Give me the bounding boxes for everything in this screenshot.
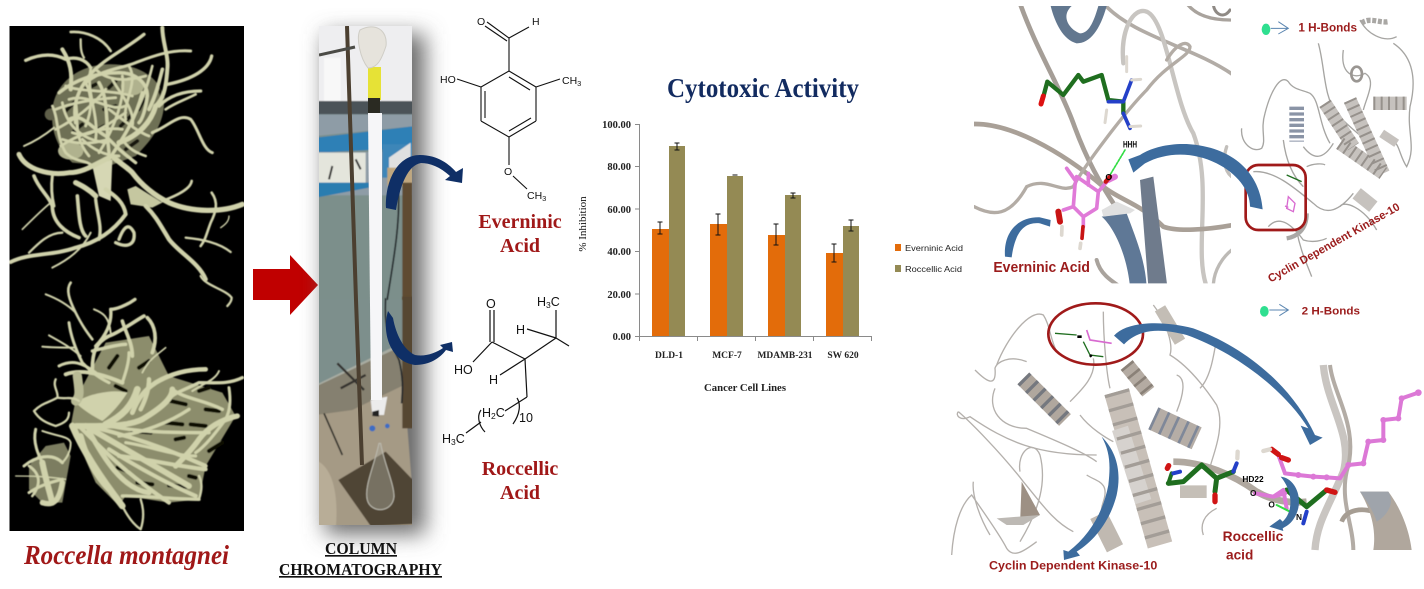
chemical structure: everninic acid: HO xyxy=(440,74,456,86)
docked ligand: roccellic acid xyxy=(1167,389,1422,523)
label: cyclin dependent kinase-10 bottom: Cyclin Dependent Kinase-10 xyxy=(989,558,1158,572)
docked ligand: roccellic acid: O xyxy=(1268,500,1275,510)
arrow: roccellic acid label xyxy=(1269,477,1299,531)
chemical structure: everninic acid: 3 xyxy=(542,194,546,203)
black band xyxy=(368,98,380,113)
yellow band xyxy=(368,67,381,100)
chemical structure: everninic acid xyxy=(440,16,581,203)
white stopper xyxy=(358,27,386,68)
legend: 2 H-bonds: 2 H-Bonds xyxy=(1302,306,1360,318)
label: roccellic acid: Roccellic xyxy=(482,458,558,480)
chemical structure: everninic acid: 3 xyxy=(577,79,581,88)
value axis labels: 100.00 xyxy=(602,120,631,131)
arrow: lichen to column xyxy=(253,255,318,315)
bars: roccellic acid xyxy=(669,146,859,336)
arrow: column to everninic acid xyxy=(386,155,463,210)
legend: 1 H-bonds xyxy=(1262,20,1357,35)
panel: lichen photo Roccella montagnei xyxy=(10,26,244,531)
lichen specimen: lower xyxy=(16,276,242,529)
label: roccellic acid: Acid xyxy=(500,482,540,504)
value axis labels: 0.00 xyxy=(613,332,631,343)
arrow: everninic overview to close-up xyxy=(1128,144,1263,209)
helices xyxy=(1325,100,1407,207)
category labels: SW 620 xyxy=(827,351,859,361)
label: everninic acid: Acid xyxy=(500,235,540,257)
legend: Roccellic Acid xyxy=(905,264,962,274)
column chromatography caption: COLUMN xyxy=(325,539,397,558)
panel: CDK-10 protein overview top xyxy=(1242,20,1413,277)
chemical structure: roccellic acid xyxy=(442,295,569,447)
chemical structure: roccellic acid: 2 xyxy=(491,411,496,421)
lichen specimen: upper xyxy=(11,28,242,279)
column chromatography caption: CHROMATOGRAPHY xyxy=(279,560,442,579)
chemical structure: everninic acid: CH xyxy=(562,75,577,87)
error bars xyxy=(658,143,854,262)
legend xyxy=(895,243,963,274)
value axis labels: 60.00 xyxy=(607,205,631,216)
chemical structure: roccellic acid: H xyxy=(537,295,546,309)
chemical structure: roccellic acid: H xyxy=(489,373,498,387)
chemical structure: roccellic acid: H xyxy=(442,432,451,446)
legend: 1 H-bonds: 1 H-Bonds xyxy=(1298,20,1357,34)
legend: 2 H-bonds xyxy=(1260,304,1360,318)
species name: Roccella montagnei xyxy=(23,540,229,570)
axis title: cancer cell lines: Cancer Cell Lines xyxy=(704,383,786,394)
label: everninic acid xyxy=(478,211,562,257)
photo scene xyxy=(316,23,416,530)
category labels: MDAMB-231 xyxy=(758,351,813,361)
clamp xyxy=(319,47,355,55)
docked ligand: roccellic acid: HD22 xyxy=(1242,474,1264,484)
docked ligand: everninic acid xyxy=(1041,57,1141,248)
arrow: everninic acid label xyxy=(1005,217,1051,257)
glass column xyxy=(368,113,382,400)
bars: everninic acid xyxy=(652,224,843,336)
column chromatography caption xyxy=(279,539,442,579)
label: roccellic acid docking: Roccellic xyxy=(1223,528,1284,544)
stand rod xyxy=(347,26,362,465)
arrow: protein label xyxy=(1063,437,1119,560)
chemical structure: roccellic acid: H xyxy=(516,323,525,337)
chemical structure: roccellic acid: 10 xyxy=(519,411,533,425)
label: roccellic acid docking xyxy=(1223,528,1284,563)
chemical structure: roccellic acid: H xyxy=(482,406,491,420)
axes xyxy=(635,124,872,341)
chemical structure: roccellic acid: C xyxy=(496,406,505,420)
chemical structure: everninic acid: H xyxy=(532,16,540,28)
label: everninic acid: Everninic xyxy=(478,211,562,233)
legend: Everninic Acid xyxy=(905,243,963,253)
value axis labels: 40.00 xyxy=(607,247,631,258)
chemical structure: roccellic acid: 3 xyxy=(546,300,551,310)
arrow: ellipse to roccellic close-up xyxy=(1114,323,1323,445)
label: roccellic acid docking: acid xyxy=(1226,547,1253,563)
chemical structure: roccellic acid: O xyxy=(486,297,496,311)
docked ligand: everninic acid: O xyxy=(1105,172,1112,182)
docked ligand: roccellic acid: N xyxy=(1296,512,1302,522)
value axis labels: 80.00 xyxy=(607,162,631,173)
docked ligand: everninic acid: HHH xyxy=(1123,139,1137,149)
label: everninic acid docking: Everninic Acid xyxy=(993,260,1090,276)
arrow: column to roccellic acid xyxy=(386,311,453,365)
panel: everninic acid docking close-up xyxy=(974,3,1233,287)
category labels: DLD-1 xyxy=(655,351,683,361)
chemical structure: roccellic acid: C xyxy=(456,432,465,446)
axis title: % inhibition: % Inhibition xyxy=(577,196,589,252)
panel: CDK-10 protein and roccellic acid docking xyxy=(952,303,1412,555)
panel: column chromatography photo xyxy=(316,23,425,534)
docked ligand: roccellic acid: O xyxy=(1250,488,1257,498)
chemical structure: roccellic acid: 3 xyxy=(451,437,456,447)
helices xyxy=(1117,392,1160,545)
chemical structure: everninic acid: CH xyxy=(527,190,542,202)
chemical structure: everninic acid: O xyxy=(477,16,485,28)
chemical structure: roccellic acid: C xyxy=(551,295,560,309)
value axis labels xyxy=(602,120,631,343)
chemical structure: everninic acid: O xyxy=(504,166,512,178)
chart title: Cytotoxic Activity xyxy=(667,73,859,103)
category labels: MCF-7 xyxy=(712,351,742,361)
value axis labels: 20.00 xyxy=(607,290,631,301)
label: cyclin dependent kinase-10 rotated: Cyclin Dependent Kinase-10 xyxy=(1266,201,1402,285)
label: roccellic acid xyxy=(482,458,558,504)
chemical structure: roccellic acid: HO xyxy=(454,363,473,377)
bar chart: cytotoxic activity xyxy=(577,120,872,394)
category labels xyxy=(655,351,859,361)
